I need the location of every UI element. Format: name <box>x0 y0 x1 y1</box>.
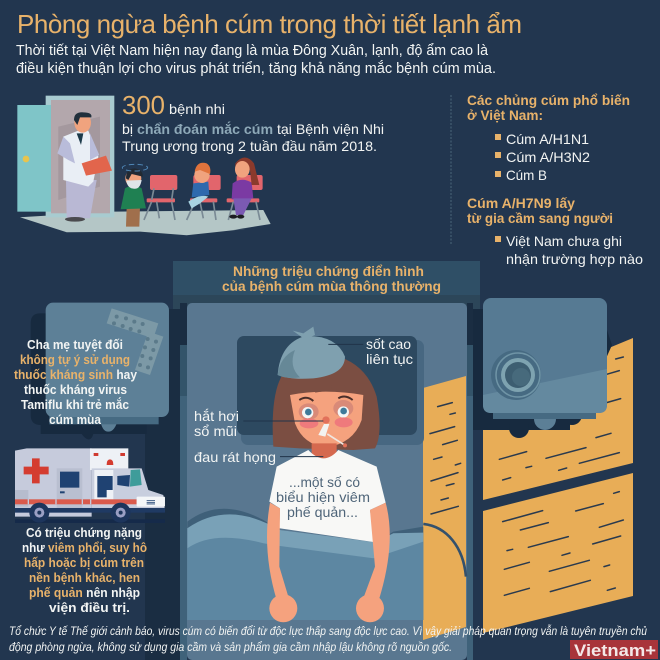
panel: H7N9: Việt Nam chưa ghi <box>506 233 622 249</box>
panel: flu strains: Các chủng cúm phổ biến <box>467 93 630 108</box>
symptom labels: liên tục <box>366 351 413 367</box>
panel: H7N9 <box>467 196 643 267</box>
panel: H7N9: Cúm A/H7N9 lấy <box>467 196 576 211</box>
panel: H7N9: nhận trường hợp nào <box>506 251 643 267</box>
headline statistic: Trung ương trong 2 tuần đầu năm 2018. <box>122 138 377 154</box>
panel: flu strains: Cúm A/H1N1 <box>506 131 589 147</box>
headline statistic: 300 <box>122 90 165 120</box>
symptom labels: hắt hơi <box>194 408 239 424</box>
shirt text: biểu hiện viêm <box>276 489 370 505</box>
left warning text <box>14 338 137 427</box>
icon: ambulance <box>15 448 165 523</box>
panel: H7N9: từ gia cầm sang người <box>467 211 613 226</box>
ambulance advice text: nền bệnh khác, hen <box>29 571 140 585</box>
left warning text: cúm mùa <box>49 413 102 427</box>
headline statistic: bệnh nhi <box>169 101 225 117</box>
symptom labels: đau rát họng <box>194 449 276 465</box>
illustration: right nightstand <box>483 298 607 430</box>
left warning text: không tự ý sử dụng <box>20 353 130 367</box>
banner heading: của bệnh cúm mùa thông thường <box>222 279 441 294</box>
left warning text: Cha mẹ tuyệt đối <box>27 338 123 352</box>
illustration: window right <box>473 309 633 633</box>
left warning text: thuốc kháng sinh hay <box>14 368 137 382</box>
illustration: left nightstand with pills <box>31 303 169 439</box>
headline statistic <box>122 90 384 154</box>
ambulance advice text <box>22 526 147 615</box>
intro text: điều kiện thuận lợi cho virus phát triển, tăng khả năng mắc bệnh cúm mùa. <box>16 60 496 77</box>
ambulance advice text: Có triệu chứng nặng <box>26 526 142 540</box>
illustration: doctor and children at clinic door <box>17 96 271 235</box>
panel: flu strains: Cúm A/H3N2 <box>506 149 590 165</box>
panel: flu strains: Cúm B <box>506 167 547 183</box>
footer note <box>9 625 648 654</box>
intro text <box>16 43 496 77</box>
banner heading: Những triệu chứng điển hình <box>233 264 424 279</box>
illustration: bed <box>187 303 467 660</box>
shirt text: ...một số có <box>289 474 360 490</box>
banner heading <box>173 261 480 295</box>
shirt text <box>276 474 370 520</box>
ambulance advice text: viện điều trị. <box>49 601 130 615</box>
panel: flu strains <box>467 93 630 183</box>
symptom labels: sổ mũi <box>194 423 237 439</box>
headline statistic: bị chẩn đoán mắc cúm tại Bệnh viện Nhi <box>122 120 384 137</box>
wall and bed side strips <box>145 295 483 660</box>
intro text: Thời tiết tại Việt Nam hiện nay đang là mùa Đông Xuân, lạnh, độ ẩm cao là <box>16 43 489 59</box>
footer note: động phòng ngừa, không sử dụng gia cầm và sản phẩm gia cầm nhập lậu không rõ nguồn gốc. <box>9 642 452 654</box>
title: Phòng ngừa bệnh cúm trong thời tiết lạnh ẩm <box>17 9 522 39</box>
left warning text: Tamiflu khi trẻ mắc <box>21 397 129 412</box>
symptom labels: sốt cao <box>366 336 411 352</box>
ambulance advice text: phế quản nên nhập <box>29 586 140 600</box>
logo: Vietnam+: Vietnam+ <box>574 641 656 660</box>
illustration: sick girl in bed <box>187 327 466 622</box>
symptom labels <box>194 336 413 465</box>
ambulance advice text: hấp hoặc bị cúm trên <box>24 556 144 570</box>
left warning text: thuốc kháng virus <box>24 383 127 397</box>
ambulance advice text: như viêm phổi, suy hô <box>22 541 147 555</box>
shirt text: phế quản... <box>287 504 358 520</box>
panel: flu strains: ở Việt Nam: <box>467 108 543 123</box>
